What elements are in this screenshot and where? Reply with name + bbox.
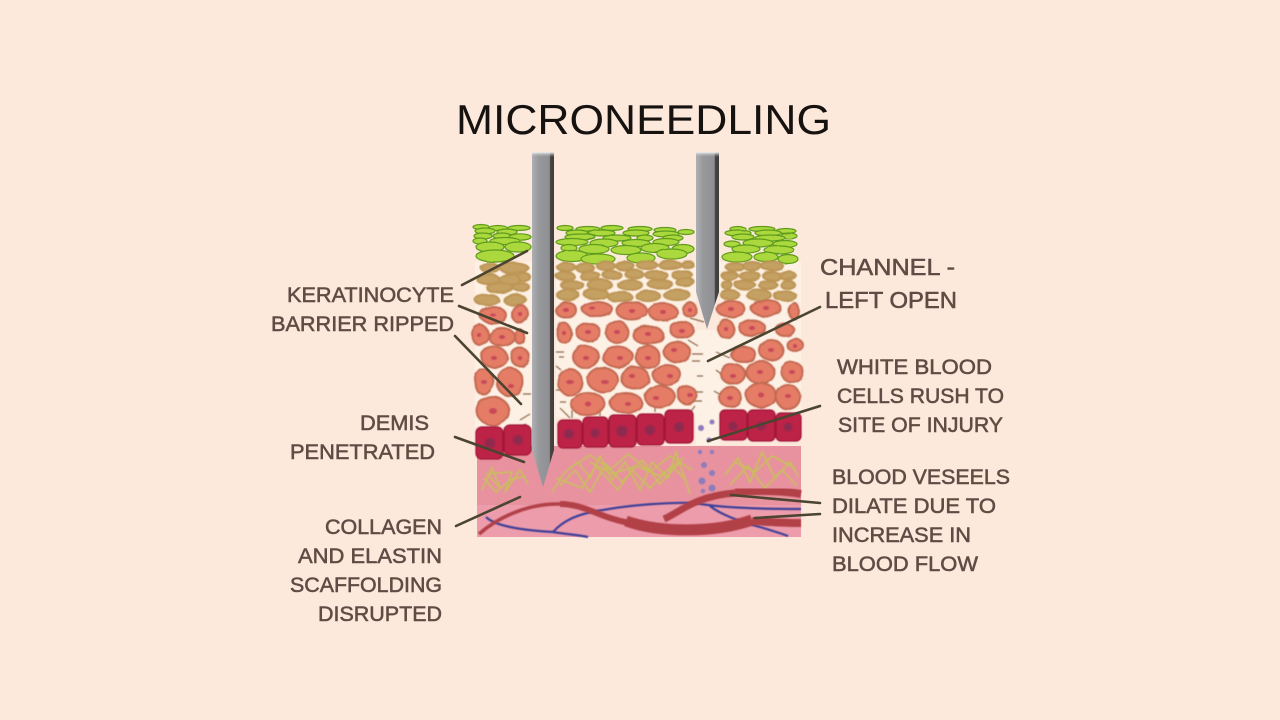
label: keratinocyte barrier (271, 283, 454, 336)
label: collagen and elastin: SCAFFOLDING (290, 573, 442, 597)
label: dermis penetrated: PENETRATED (290, 440, 435, 464)
blue veins (486, 503, 801, 537)
label: collagen and elastin: AND ELASTIN (298, 544, 442, 568)
brown granular cells (475, 261, 796, 305)
label: white blood cells: CELLS RUSH TO (837, 384, 1004, 408)
skin diagram (472, 152, 803, 537)
basal cell nuclei (485, 422, 792, 448)
cell spines (512, 318, 730, 432)
orange spinous cells (472, 300, 803, 425)
label: channel left open: CHANNEL - (820, 254, 955, 280)
leader lines right (708, 307, 820, 518)
orange cell nuclei (477, 306, 797, 414)
leader lines left (455, 251, 527, 526)
label: blood vessels: INCREASE IN (832, 523, 971, 547)
label: dermis penetrated (290, 411, 435, 464)
label: white blood cells: SITE OF INJURY (838, 413, 1003, 437)
title: MICRONEEDLING (456, 96, 831, 143)
label: channel left open: LEFT OPEN (825, 287, 957, 313)
label: keratinocyte barrier: BARRIER RIPPED (271, 312, 454, 336)
collagen and elastin fibres (482, 452, 798, 494)
label: blood vessels: DILATE DUE TO (832, 494, 996, 518)
label: white blood cells (837, 355, 1004, 437)
white blood cells (698, 420, 716, 493)
label: dermis penetrated: DEMIS (360, 411, 429, 435)
right microneedle with channel (696, 152, 719, 329)
green stratum corneum cells (473, 224, 798, 264)
label: blood vessels: BLOOD VESEELS (832, 465, 1010, 489)
left microneedle (532, 152, 554, 487)
red basal cells (476, 410, 801, 459)
label: collagen and elastin (290, 515, 442, 626)
label: keratinocyte barrier: KERATINOCYTE (287, 283, 454, 307)
label: blood vessels: BLOOD FLOW (832, 552, 979, 576)
epidermis pale backing (475, 262, 801, 445)
label: white blood cells: WHITE BLOOD (837, 355, 992, 379)
red blood vessels (479, 491, 801, 534)
label: blood vessels (832, 465, 1010, 576)
label: collagen and elastin: DISRUPTED (318, 602, 442, 626)
dermis layer (477, 446, 801, 537)
label: channel left open (820, 254, 957, 313)
label: collagen and elastin: COLLAGEN (325, 515, 442, 539)
